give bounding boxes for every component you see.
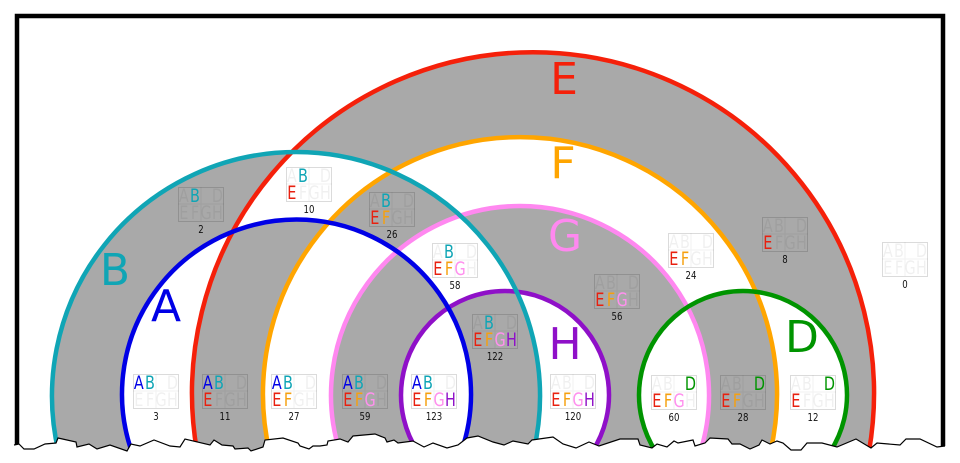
label G: G [548,211,582,262]
label B: B [100,245,130,296]
circle B [52,152,540,452]
region 120: F [563,389,571,410]
region 120: D [584,372,595,393]
region 8: E [763,232,772,253]
region 3: D [167,372,178,393]
region 120 [550,372,596,423]
region 12: D [824,373,835,394]
region 24: H [702,248,713,269]
circle G [331,206,709,452]
region 0: F [895,257,903,278]
region 56 [594,272,640,323]
region 27: E [272,389,281,410]
region 28: B [732,373,742,394]
region 10: D [320,165,331,186]
region 120: 120 [565,411,581,423]
region 8: A [763,215,773,236]
region 3: 3 [153,411,159,423]
region 56: A [595,272,605,293]
region 27: D [305,372,316,393]
region 12: A [791,373,801,394]
region 59: D [376,372,387,393]
region 24: G [690,248,702,269]
region 12 [790,373,836,424]
region 8: B [774,215,784,236]
region 24: A [669,231,679,252]
region 2: 2 [198,224,204,236]
region 60 [651,373,697,424]
region 24: F [681,248,689,269]
region 2: E [179,202,188,223]
region 0: A [883,240,893,261]
region 59: 59 [360,411,370,423]
region 10: E [287,182,296,203]
region 120: G [572,389,584,410]
region 10: 10 [304,204,314,216]
region 3: G [155,389,167,410]
region 27 [271,372,317,423]
region 3: E [134,389,143,410]
region 26 [369,190,415,241]
torn bottom edge [0,434,960,463]
region 123: E [412,389,421,410]
region 8: D [796,215,807,236]
region 58: B [444,241,454,262]
region 60: G [673,390,685,411]
region 0: G [904,257,916,278]
region 0: H [916,257,927,278]
region 10: B [298,165,308,186]
region 28: F [733,390,741,411]
region 123: 123 [426,411,442,423]
circle H [401,291,609,452]
region 11: G [224,389,236,410]
region 56: 56 [612,311,622,323]
region 28: 28 [738,412,748,424]
region 58 [432,241,478,292]
region 56: H [628,289,639,310]
region 2: G [200,202,212,223]
region 11: F [215,389,223,410]
region 3 [133,372,179,423]
region 8 [762,215,808,266]
region 60: H [685,390,696,411]
region 26: D [403,190,414,211]
region 0: B [894,240,904,261]
region 59 [342,372,388,423]
region 10 [286,165,332,216]
region 10: F [299,182,307,203]
region 59: H [376,389,387,410]
region 122: F [485,329,493,350]
region 12: E [791,390,800,411]
region 28: A [721,373,731,394]
region 60: D [685,373,696,394]
region 123: A [412,372,422,393]
region 56: B [606,272,616,293]
region 27: A [272,372,282,393]
region 24: E [669,248,678,269]
region 2: D [212,185,223,206]
region 60: B [663,373,673,394]
region 58: 58 [450,280,460,292]
region 122: 122 [487,351,503,363]
region 26: B [381,190,391,211]
region 0: 0 [902,279,908,291]
circle E [192,52,874,452]
region 11 [202,372,248,423]
region 26: 26 [387,229,397,241]
region 28: H [754,390,765,411]
region 56: F [607,289,615,310]
region 2 [178,185,224,236]
region 12: 12 [808,412,818,424]
region 28: G [742,390,754,411]
region 0 [882,240,928,291]
region 0: D [916,240,927,261]
region 58: F [445,258,453,279]
region 3: B [145,372,155,393]
region 120: B [562,372,572,393]
region 123: D [445,372,456,393]
region 8: 8 [782,254,788,266]
label A: A [151,281,181,332]
region 11: D [236,372,247,393]
region 26: H [403,207,414,228]
region 26: A [370,190,380,211]
region 0: E [883,257,892,278]
region 3: A [134,372,144,393]
region 11: B [214,372,224,393]
region 27: F [284,389,292,410]
region 27: 27 [289,411,299,423]
region 59: A [343,372,353,393]
region 3: F [146,389,154,410]
region 120: A [551,372,561,393]
region 58: A [433,241,443,262]
region 122: G [494,329,506,350]
region 11: 11 [220,411,230,423]
region 10: H [320,182,331,203]
circle D [639,291,847,452]
region 123: B [423,372,433,393]
label D: D [785,312,819,363]
region 120: H [584,389,595,410]
region 2: A [179,185,189,206]
region 122: D [506,312,517,333]
region 28 [720,373,766,424]
region 26: E [370,207,379,228]
region 26: G [391,207,403,228]
region 8: F [775,232,783,253]
region 58: H [466,258,477,279]
region 59: F [355,389,363,410]
region 56: G [616,289,628,310]
label E: E [550,54,578,105]
region 56: D [628,272,639,293]
region 11: H [236,389,247,410]
region 12: F [803,390,811,411]
region 24 [668,231,714,282]
region 8: H [796,232,807,253]
region 12: G [812,390,824,411]
region 3: H [167,389,178,410]
label H: H [548,319,582,370]
region 122: H [506,329,517,350]
region 60: 60 [669,412,679,424]
region 24: B [680,231,690,252]
region 26: F [382,207,390,228]
region 27: H [305,389,316,410]
region 10: A [287,165,297,186]
circle A [122,220,471,452]
region 122: B [484,312,494,333]
region 28: D [754,373,765,394]
region 123: H [445,389,456,410]
region 2: B [190,185,200,206]
region 58: G [454,258,466,279]
region 123 [411,372,457,423]
region 27: G [293,389,305,410]
even-odd shaded regions [52,52,874,452]
region 12: B [802,373,812,394]
torn edge line [14,434,945,451]
region 58: D [466,241,477,262]
region 11: E [203,389,212,410]
region 28: E [721,390,730,411]
region 56: E [595,289,604,310]
region 59: G [364,389,376,410]
region 2: H [212,202,223,223]
region 59: E [343,389,352,410]
region 24: 24 [686,270,696,282]
region 12: H [824,390,835,411]
region 10: G [308,182,320,203]
region 123: F [424,389,432,410]
region 58: E [433,258,442,279]
region 120: E [551,389,560,410]
region 60: A [652,373,662,394]
circle F [263,137,777,452]
region 8: G [784,232,796,253]
region 122 [472,312,518,363]
label F: F [550,138,576,189]
region 122: E [473,329,482,350]
region 24: D [702,231,713,252]
region 122: A [473,312,483,333]
region 60: E [652,390,661,411]
region 59: B [354,372,364,393]
region 2: F [191,202,199,223]
region 60: F [664,390,672,411]
region 27: B [283,372,293,393]
region 123: G [433,389,445,410]
region 11: A [203,372,213,393]
